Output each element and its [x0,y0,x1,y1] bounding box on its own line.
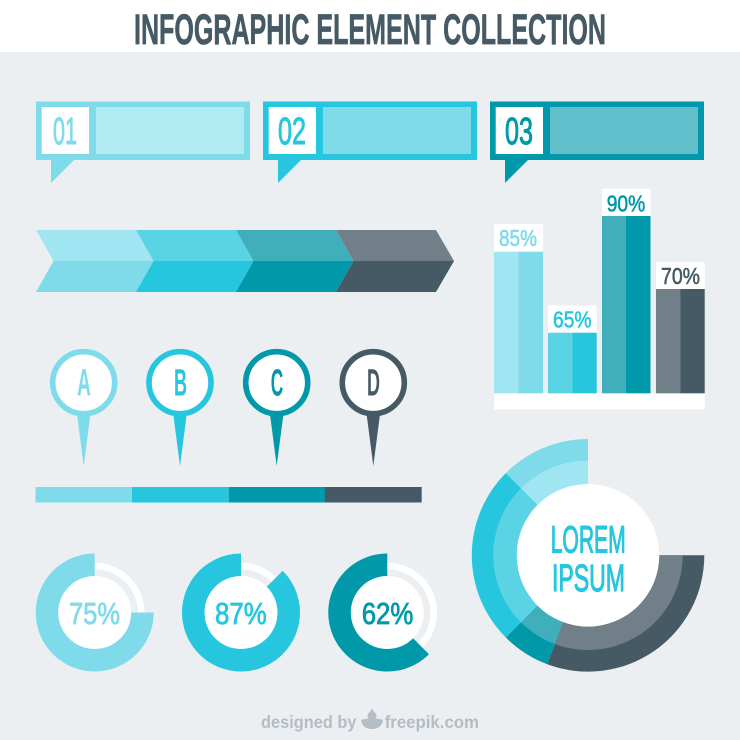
bar: 70%: 70% [661,263,700,289]
panel: speech box 01 [36,102,250,183]
icon: freepik logo [361,709,383,729]
icon: map pin A: A [77,363,91,405]
text: lorem ipsum: IPSUM [552,558,625,600]
bar chart [494,189,705,409]
donut: 75%: 75% [69,596,120,631]
bar: 85%: 85% [499,225,537,251]
bar: 90%: 90% [607,190,645,216]
icon: map pin B [149,352,211,466]
icon: map pin C [246,352,308,466]
text: lorem ipsum [551,519,626,600]
panel: speech box 02 [263,102,477,183]
donut: 87% [182,554,300,672]
bar: 85% [494,224,543,393]
arrow: chevron band [36,230,454,292]
donut: 75% [36,554,154,672]
progress bar [36,487,422,502]
icon: map pin D: D [367,363,380,405]
footer credit: designed by [261,712,357,732]
bar: 65%: 65% [553,306,592,332]
panel: speech box 03 [490,102,704,183]
bar: 65% [548,305,597,393]
chart: large segmented ring [472,439,704,672]
donut: 87%: 87% [215,596,267,631]
footer credit: freepik.com [385,712,479,732]
footer credit [261,709,479,732]
panel: speech box 01: 01 [53,111,77,153]
donut: 62% [328,554,434,672]
icon: map pin A [53,352,115,466]
icon: map pin C: C [271,363,283,405]
text: lorem ipsum: LOREM [551,519,626,561]
panel: speech box 02: 02 [278,111,306,153]
icon: map pin B: B [174,363,187,405]
donut: 62%: 62% [362,596,413,631]
panel: speech box 03: 03 [505,111,533,153]
bar: 90% [602,189,650,393]
icon: map pin D [342,352,404,466]
bar: 70% [656,262,705,393]
